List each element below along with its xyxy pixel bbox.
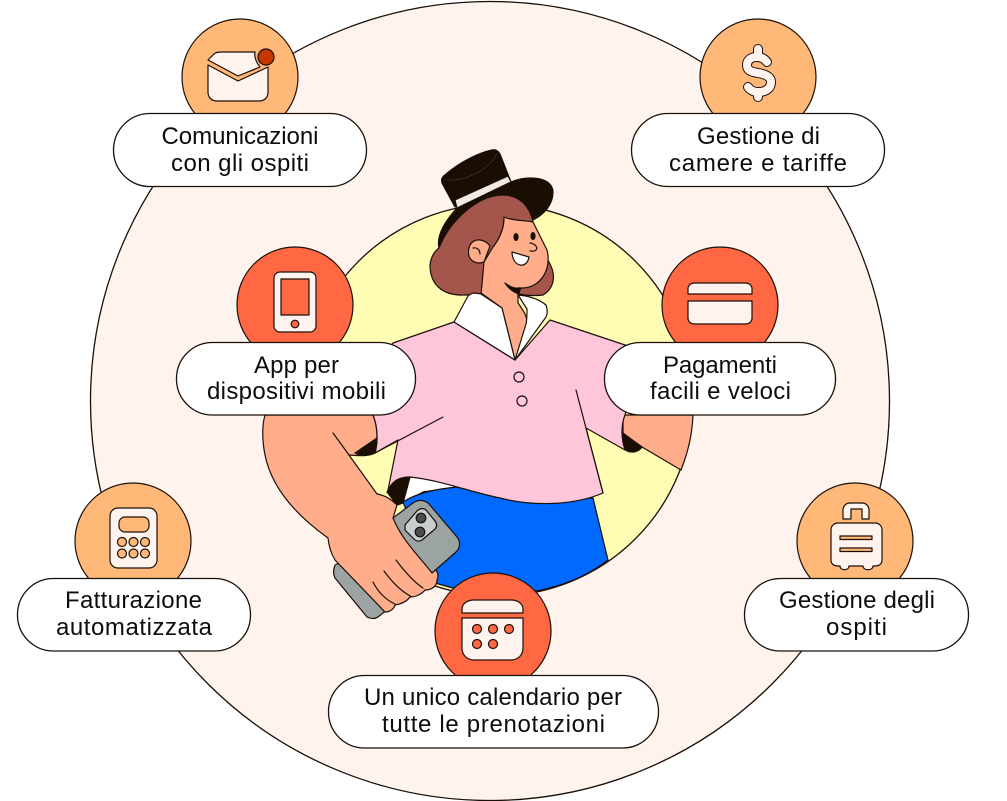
label pill: Fatturazione	[65, 587, 202, 614]
feature: mobile app	[176, 247, 416, 415]
label pill: Un unico calendario per	[364, 684, 622, 711]
feature: guest communications	[114, 19, 366, 186]
feature: guest management	[744, 483, 968, 651]
label pill: facili e veloci	[650, 378, 791, 405]
feature: rooms and rates	[632, 19, 884, 186]
label pill: App per	[254, 352, 339, 379]
icon: envelope with notification	[182, 19, 298, 135]
label pill	[176, 342, 416, 415]
label pill	[632, 114, 884, 186]
label pill: Gestione di	[697, 123, 820, 150]
background circle	[90, 2, 890, 800]
feature: single calendar	[328, 573, 658, 748]
label pill	[328, 676, 658, 748]
label pill: Comunicazioni	[162, 123, 318, 150]
label pill: dispositivi mobili	[207, 378, 386, 405]
feature: automated invoicing	[18, 483, 250, 651]
label pill: automatizzata	[56, 614, 213, 641]
feature: payments	[604, 247, 836, 415]
label pill: Pagamenti	[663, 352, 777, 379]
icon: smartphone	[237, 247, 353, 363]
label pill: tutte le prenotazioni	[382, 711, 605, 738]
icon: suitcase	[797, 483, 913, 599]
icon: dollar sign	[700, 19, 816, 135]
label pill	[604, 342, 836, 415]
icon: calendar	[435, 573, 551, 689]
label pill: Gestione degli	[779, 587, 935, 614]
label pill	[18, 578, 250, 651]
icon: calculator	[75, 483, 191, 599]
label pill: con gli ospiti	[171, 150, 309, 177]
label pill: camere e tariffe	[669, 150, 847, 177]
label pill	[114, 114, 366, 186]
icon: credit card	[662, 247, 778, 363]
label pill: ospiti	[826, 614, 887, 641]
yellow circle	[301, 204, 693, 596]
label pill	[744, 578, 968, 651]
character: concierge holding a phone	[263, 150, 693, 618]
